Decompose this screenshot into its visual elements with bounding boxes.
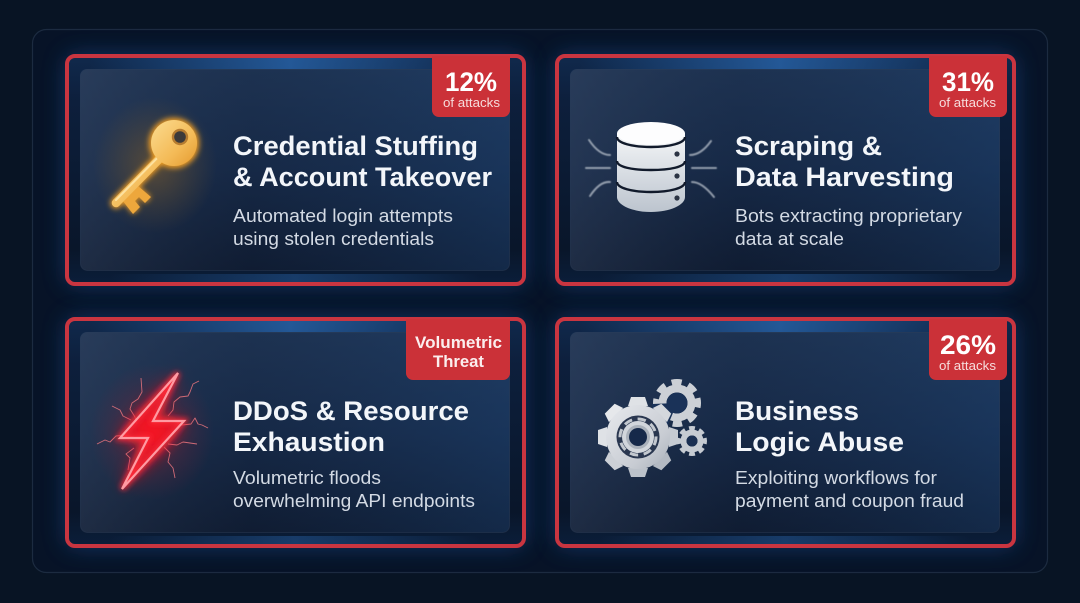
heading: Data Harvesting: [735, 162, 954, 192]
badge: 26%: [929, 319, 1007, 380]
panel: scraping: [557, 56, 1014, 284]
heading: Scraping &: [735, 131, 882, 161]
heading: [233, 131, 492, 192]
heading: [735, 396, 904, 457]
description: [735, 206, 962, 249]
badge: 31%: of attacks: [939, 95, 997, 110]
inner card: [570, 332, 1000, 533]
heading: Exhaustion: [233, 427, 385, 457]
description: [233, 468, 475, 511]
description: using stolen credentials: [233, 229, 434, 249]
badge: 26%: 26%: [940, 330, 996, 360]
badge: 31%: 31%: [942, 67, 994, 97]
badge: volumetric threat: Volumetric: [415, 333, 502, 352]
icon: red lightning bolt: [90, 364, 214, 500]
badge: 31%: [929, 56, 1007, 117]
icon: golden key: [93, 97, 217, 233]
description: Volumetric floods: [233, 468, 381, 488]
badge: volumetric threat: [406, 319, 510, 380]
description: overwhelming API endpoints: [233, 491, 475, 511]
heading: [735, 131, 954, 192]
heading: DDoS & Resource: [233, 396, 469, 426]
badge: volumetric threat: Threat: [433, 352, 484, 371]
small gear: [676, 425, 708, 457]
description: Automated login attempts: [233, 206, 453, 226]
heading: & Account Takeover: [233, 162, 492, 192]
description: payment and coupon fraud: [735, 491, 964, 511]
heading: [233, 396, 469, 457]
description: [233, 206, 453, 249]
description: Exploiting workflows for: [735, 468, 937, 488]
icon: database with data lines: [586, 122, 716, 212]
description: Bots extracting proprietary: [735, 206, 962, 226]
top gear: [652, 378, 702, 434]
heading: Credential Stuffing: [233, 131, 478, 161]
heading: Business: [735, 396, 859, 426]
panel: ddos: [67, 319, 524, 546]
description: data at scale: [735, 229, 844, 249]
panel: business logic: [557, 319, 1014, 546]
heading: Logic Abuse: [735, 427, 904, 457]
inner card: [80, 69, 510, 271]
inner card: [570, 69, 1000, 271]
badge: 26%: of attacks: [939, 358, 997, 373]
badge: 12%: of attacks: [443, 95, 501, 110]
badge: 12%: [432, 56, 510, 117]
inner card: [80, 332, 510, 533]
badge: 12%: 12%: [445, 67, 497, 97]
panel: credential stuffing: [67, 56, 524, 284]
large gear: [598, 397, 678, 477]
icon: gears: [598, 378, 708, 477]
description: [735, 468, 964, 511]
